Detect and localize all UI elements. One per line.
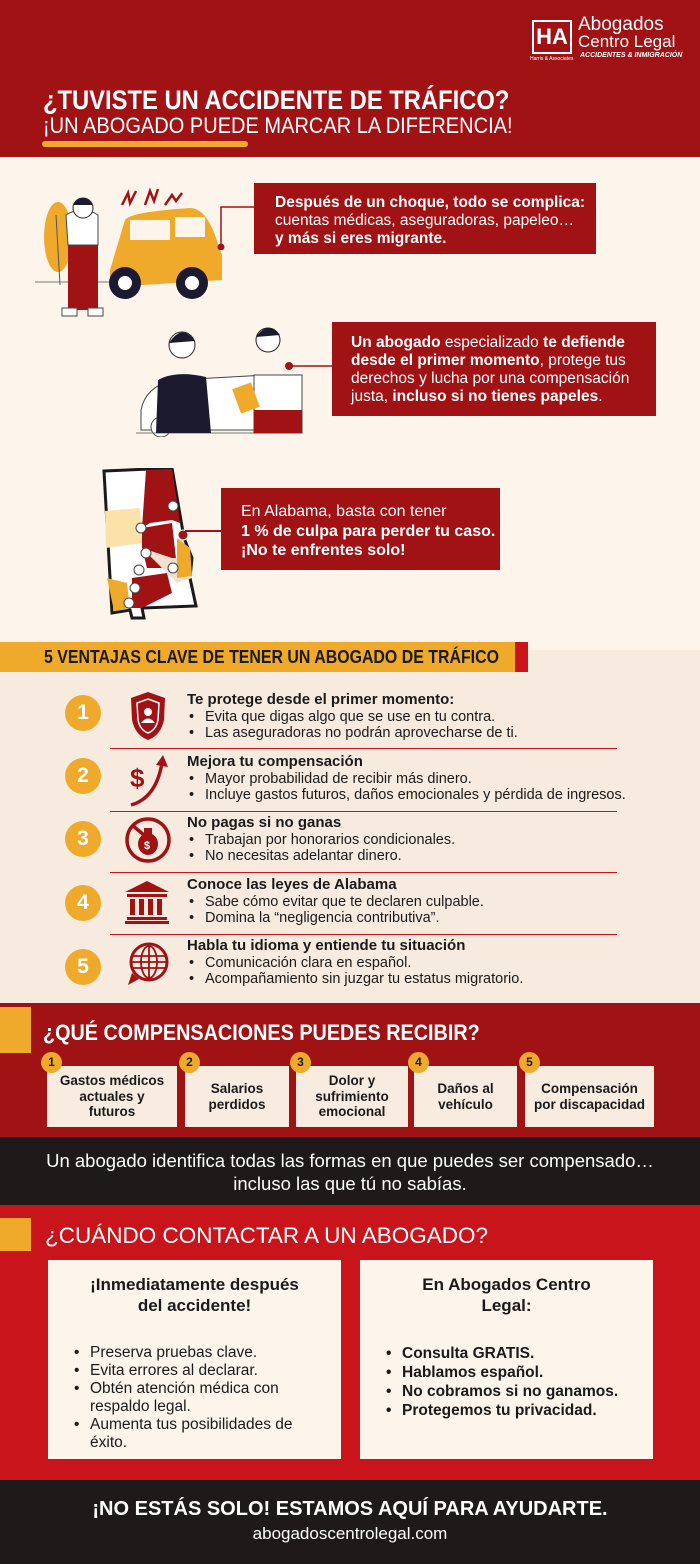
ventaja 5: Habla tu idioma y entiende tu situación (187, 937, 465, 954)
ventaja 2: Incluye gastos futuros, daños emocionales y pérdida de ingresos. (205, 787, 626, 803)
icon: money up (130, 755, 168, 807)
ventaja 3: 3 (77, 827, 89, 850)
logo: Abogados (578, 14, 664, 35)
logo (530, 14, 682, 62)
comp 5: Compensación (541, 1081, 638, 1096)
text: 5 (526, 1055, 533, 1069)
ventaja 5: Comunicación clara en español. (205, 954, 411, 970)
comp 3 (296, 1066, 408, 1127)
callout 1 (254, 183, 596, 254)
cuando section (0, 1205, 700, 1480)
box: inmediatamente: del accidente! (138, 1296, 251, 1315)
logo: Centro Legal (578, 32, 675, 51)
comp 2: perdidos (208, 1096, 266, 1112)
ventaja 4 (65, 876, 484, 926)
comp 1: actuales y (79, 1089, 145, 1104)
ventaja 1: Las aseguradoras no podrán aprovecharse de ti. (205, 725, 518, 741)
logo: HA (536, 24, 568, 49)
footer: ¡NO ESTÁS SOLO! ESTAMOS AQUÍ PARA AYUDARTE. (92, 1498, 608, 1520)
black band message (0, 1137, 700, 1205)
comp 4: Daños al (437, 1081, 494, 1096)
comp 1 (47, 1066, 177, 1127)
box: inmediatamente (48, 1260, 341, 1459)
comp 3: Dolor y (329, 1073, 375, 1088)
ventaja 3: No pagas si no ganas (187, 814, 341, 831)
box: inmediatamente: ¡Inmediatamente después (90, 1275, 299, 1294)
comp 3: sufrimiento (315, 1089, 389, 1104)
icon: shield (131, 692, 165, 740)
box: inmediatamente: Evita errores al declarar. (90, 1362, 258, 1379)
ventaja 5 (65, 937, 523, 987)
box: centro legal: Hablamos español. (402, 1364, 543, 1381)
box: centro legal: Consulta GRATIS. (402, 1345, 534, 1362)
callout 3: En Alabama, basta con tener (241, 503, 446, 520)
black band message: incluso las que tú no sabías. (233, 1173, 467, 1194)
text: 4 (415, 1055, 422, 1069)
logo: Harris & Associates (530, 56, 573, 62)
icon: money up: $ (130, 763, 145, 793)
text: 2 (186, 1055, 193, 1069)
ventajas heading (0, 642, 528, 672)
connector 3 (185, 530, 221, 532)
comp 5 (525, 1066, 654, 1127)
callout 2 (332, 322, 656, 416)
ventaja 4: Domina la “negligencia contributiva”. (205, 910, 440, 926)
ventajas heading: 5 VENTAJAS CLAVE DE TENER UN ABOGADO DE TRÁFICO (44, 646, 499, 667)
ventaja 4: Conoce las leyes de Alabama (187, 876, 397, 893)
callout 3: ¡No te enfrentes solo! (241, 542, 405, 559)
ventaja 5: 5 (77, 955, 89, 978)
text: 1 (48, 1055, 55, 1069)
comp 1: Gastos médicos (60, 1073, 164, 1088)
ventaja 1: Evita que digas algo que se use en tu contra. (205, 708, 495, 724)
ventaja 1 (65, 691, 518, 741)
header (0, 0, 700, 157)
callout 1: cuentas médicas, aseguradoras, papeleo… (275, 212, 574, 229)
ventaja 5: Acompañamiento sin juzgar tu estatus migratorio. (205, 971, 523, 987)
comp 1: futuros (89, 1104, 135, 1119)
ventaja 2: Mejora tu compensación (187, 753, 363, 770)
ventaja 1: 1 (77, 701, 89, 724)
ventaja 2: Mayor probabilidad de recibir más dinero. (205, 770, 472, 786)
connector 2 (285, 362, 332, 370)
callout 2: Un abogado especializado te defiende desde el primer momento, protege tus derechos y lucha por una compensación justa, incluso si no tienes papeles. (351, 334, 629, 405)
box: centro legal: Protegemos tu privacidad. (402, 1402, 597, 1419)
title: ¿TUVISTE UN ACCIDENTE DE TRÁFICO? (43, 85, 509, 115)
compensaciones title: ¿QUÉ COMPENSACIONES PUEDES RECIBIR? (43, 1020, 480, 1045)
box: inmediatamente: Preserva pruebas clave. (90, 1344, 257, 1361)
map: alabama (102, 468, 198, 620)
box: inmediatamente: Aumenta tus posibilidades de éxito. (90, 1416, 292, 1451)
ventaja 3: No necesitas adelantar dinero. (205, 848, 402, 864)
comp 5: por discapacidad (534, 1096, 645, 1112)
illustration: crash (35, 188, 222, 316)
underline bar (42, 141, 248, 147)
ventaja 4: 4 (77, 891, 89, 914)
cuando title: ¿CUÁNDO CONTACTAR A UN ABOGADO? (45, 1223, 488, 1248)
icon: globe chat (128, 942, 168, 985)
box: centro legal: No cobramos si no ganamos. (402, 1383, 618, 1400)
comp 2: Salarios (211, 1081, 263, 1096)
comp 4: vehículo (438, 1096, 493, 1112)
logo: ACCIDENTES & INMIGRACIÓN (580, 52, 682, 59)
ventaja 2 (65, 753, 626, 807)
text: 3 (297, 1055, 304, 1069)
footer: abogadoscentrolegal.com (253, 1524, 447, 1543)
box: centro legal: Legal: (481, 1296, 532, 1315)
callout 1: Después de un choque, todo se complica: (275, 194, 585, 211)
ventajas background (0, 650, 700, 1003)
ventaja 2: 2 (77, 764, 89, 787)
illustration: lawyer (136, 328, 302, 437)
comp 2 (185, 1066, 289, 1127)
ventaja 3: Trabajan por honorarios condicionales. (205, 832, 455, 848)
comp 4 (414, 1066, 517, 1127)
ventaja 4: Sabe cómo evitar que te declaren culpable. (205, 894, 484, 910)
icon: courthouse (125, 881, 169, 924)
icon: no payment: $ (144, 840, 150, 852)
compensaciones section (0, 1003, 700, 1137)
footer (0, 1480, 700, 1564)
callout 1: y más si eres migrante. (275, 230, 446, 247)
box: centro legal (360, 1260, 653, 1459)
callout 3: 1 % de culpa para perder tu caso. (241, 522, 495, 540)
ventaja 3 (65, 814, 455, 864)
ventaja 1: Te protege desde el primer momento: (187, 691, 454, 708)
box: centro legal: En Abogados Centro (422, 1275, 591, 1294)
box: inmediatamente: Obtén atención médica con respaldo legal. (90, 1380, 279, 1415)
subtitle: ¡UN ABOGADO PUEDE MARCAR LA DIFERENCIA! (43, 113, 513, 138)
comp 3: emocional (319, 1104, 385, 1119)
icon: no payment (125, 817, 171, 863)
black band message: Un abogado identifica todas las formas en que puedes ser compensado… (46, 1150, 654, 1171)
callout 3 (221, 488, 500, 570)
connector 1 (218, 206, 254, 250)
